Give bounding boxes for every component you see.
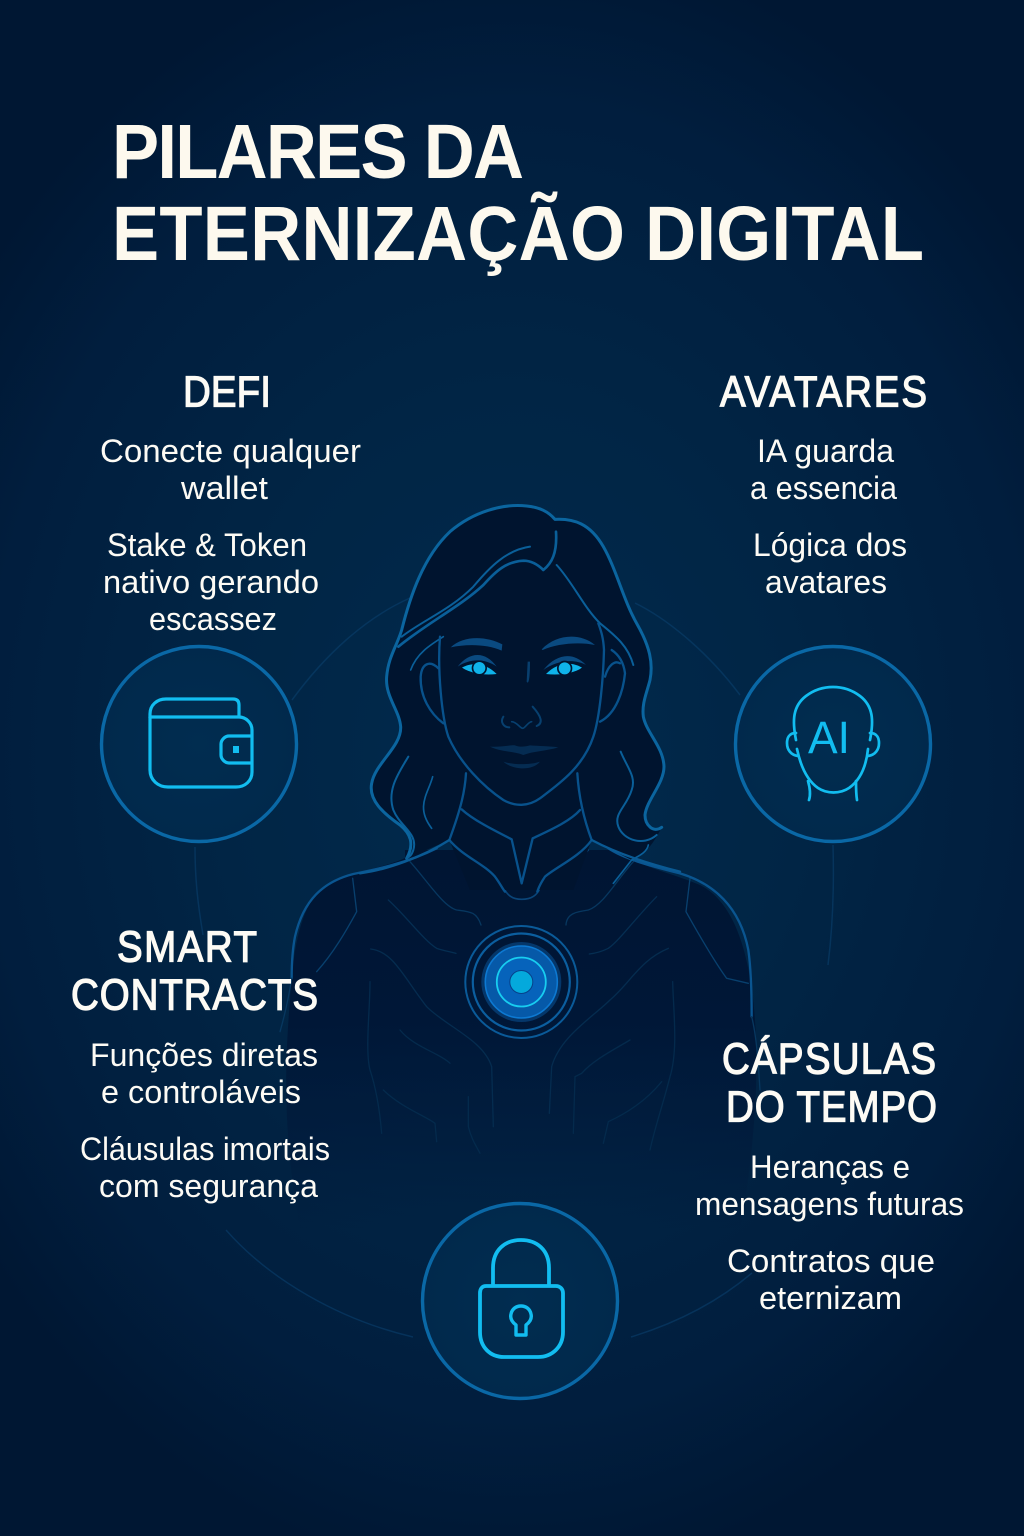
panel: smart contracts	[71, 922, 330, 1204]
eyebrows	[451, 637, 595, 670]
hair outline	[371, 506, 664, 858]
text: defi description: Conecte qualquer	[100, 433, 361, 469]
face lines	[360, 623, 680, 892]
chest core	[465, 926, 577, 1038]
panel: defi	[100, 367, 361, 842]
icon: ai head: AI	[808, 712, 850, 763]
heading: capsulas do tempo: DO TEMPO	[726, 1082, 937, 1131]
head silhouette	[371, 506, 664, 890]
mouth	[490, 745, 558, 768]
text: avatares description: avatares	[765, 564, 887, 600]
title	[112, 108, 924, 277]
panel: capsulas do tempo	[422, 1034, 964, 1398]
hair inner lines	[391, 532, 657, 883]
panel: avatares	[720, 367, 930, 842]
icon: padlock	[422, 1204, 618, 1398]
text: smart contracts description: Cláusulas imortais	[80, 1131, 330, 1167]
title: PILARES DA	[112, 108, 524, 195]
head and hair	[360, 506, 680, 892]
text: defi description: nativo gerando	[103, 564, 319, 600]
text: defi description: Stake & Token	[107, 527, 307, 563]
text: capsulas description: mensagens futuras	[695, 1186, 964, 1222]
heading: capsulas do tempo: CÁPSULAS	[722, 1034, 936, 1083]
text: smart contracts description: e controláveis	[101, 1074, 301, 1110]
heading: smart contracts: SMART	[117, 922, 257, 971]
text: capsulas description: eternizam	[759, 1280, 902, 1316]
text: defi description	[100, 433, 361, 637]
text: smart contracts description: com segurança	[99, 1168, 319, 1204]
heading: avatares: AVATARES	[720, 367, 927, 416]
text: avatares description: Lógica dos	[753, 527, 907, 563]
title: ETERNIZAÇÃO DIGITAL	[112, 190, 924, 277]
orbit ring arcs	[195, 598, 833, 1337]
text: smart contracts description	[80, 1037, 330, 1204]
eyes	[462, 660, 582, 676]
central figure	[280, 506, 760, 1230]
text: avatares description	[750, 433, 907, 600]
shoulders and arms	[280, 848, 760, 1090]
nose	[502, 662, 541, 728]
text: defi description: wallet	[180, 470, 268, 506]
icon: wallet	[102, 646, 296, 842]
icon: ai head	[736, 646, 930, 842]
text: capsulas description: Heranças e	[750, 1149, 910, 1185]
text: capsulas description: Contratos que	[727, 1243, 935, 1279]
heading: defi: DEFI	[183, 367, 271, 416]
text: avatares description: IA guarda	[757, 433, 895, 469]
heading: smart contracts: CONTRACTS	[71, 970, 318, 1019]
heading: capsulas do tempo	[722, 1034, 937, 1131]
figure body silhouette	[286, 850, 756, 1230]
text: defi description: escassez	[149, 601, 277, 637]
text: smart contracts description: Funções diretas	[90, 1037, 318, 1073]
text: capsulas description	[695, 1149, 964, 1316]
figure body lines	[317, 862, 748, 1153]
text: avatares description: a essencia	[750, 470, 898, 506]
heading: smart contracts	[71, 922, 318, 1019]
